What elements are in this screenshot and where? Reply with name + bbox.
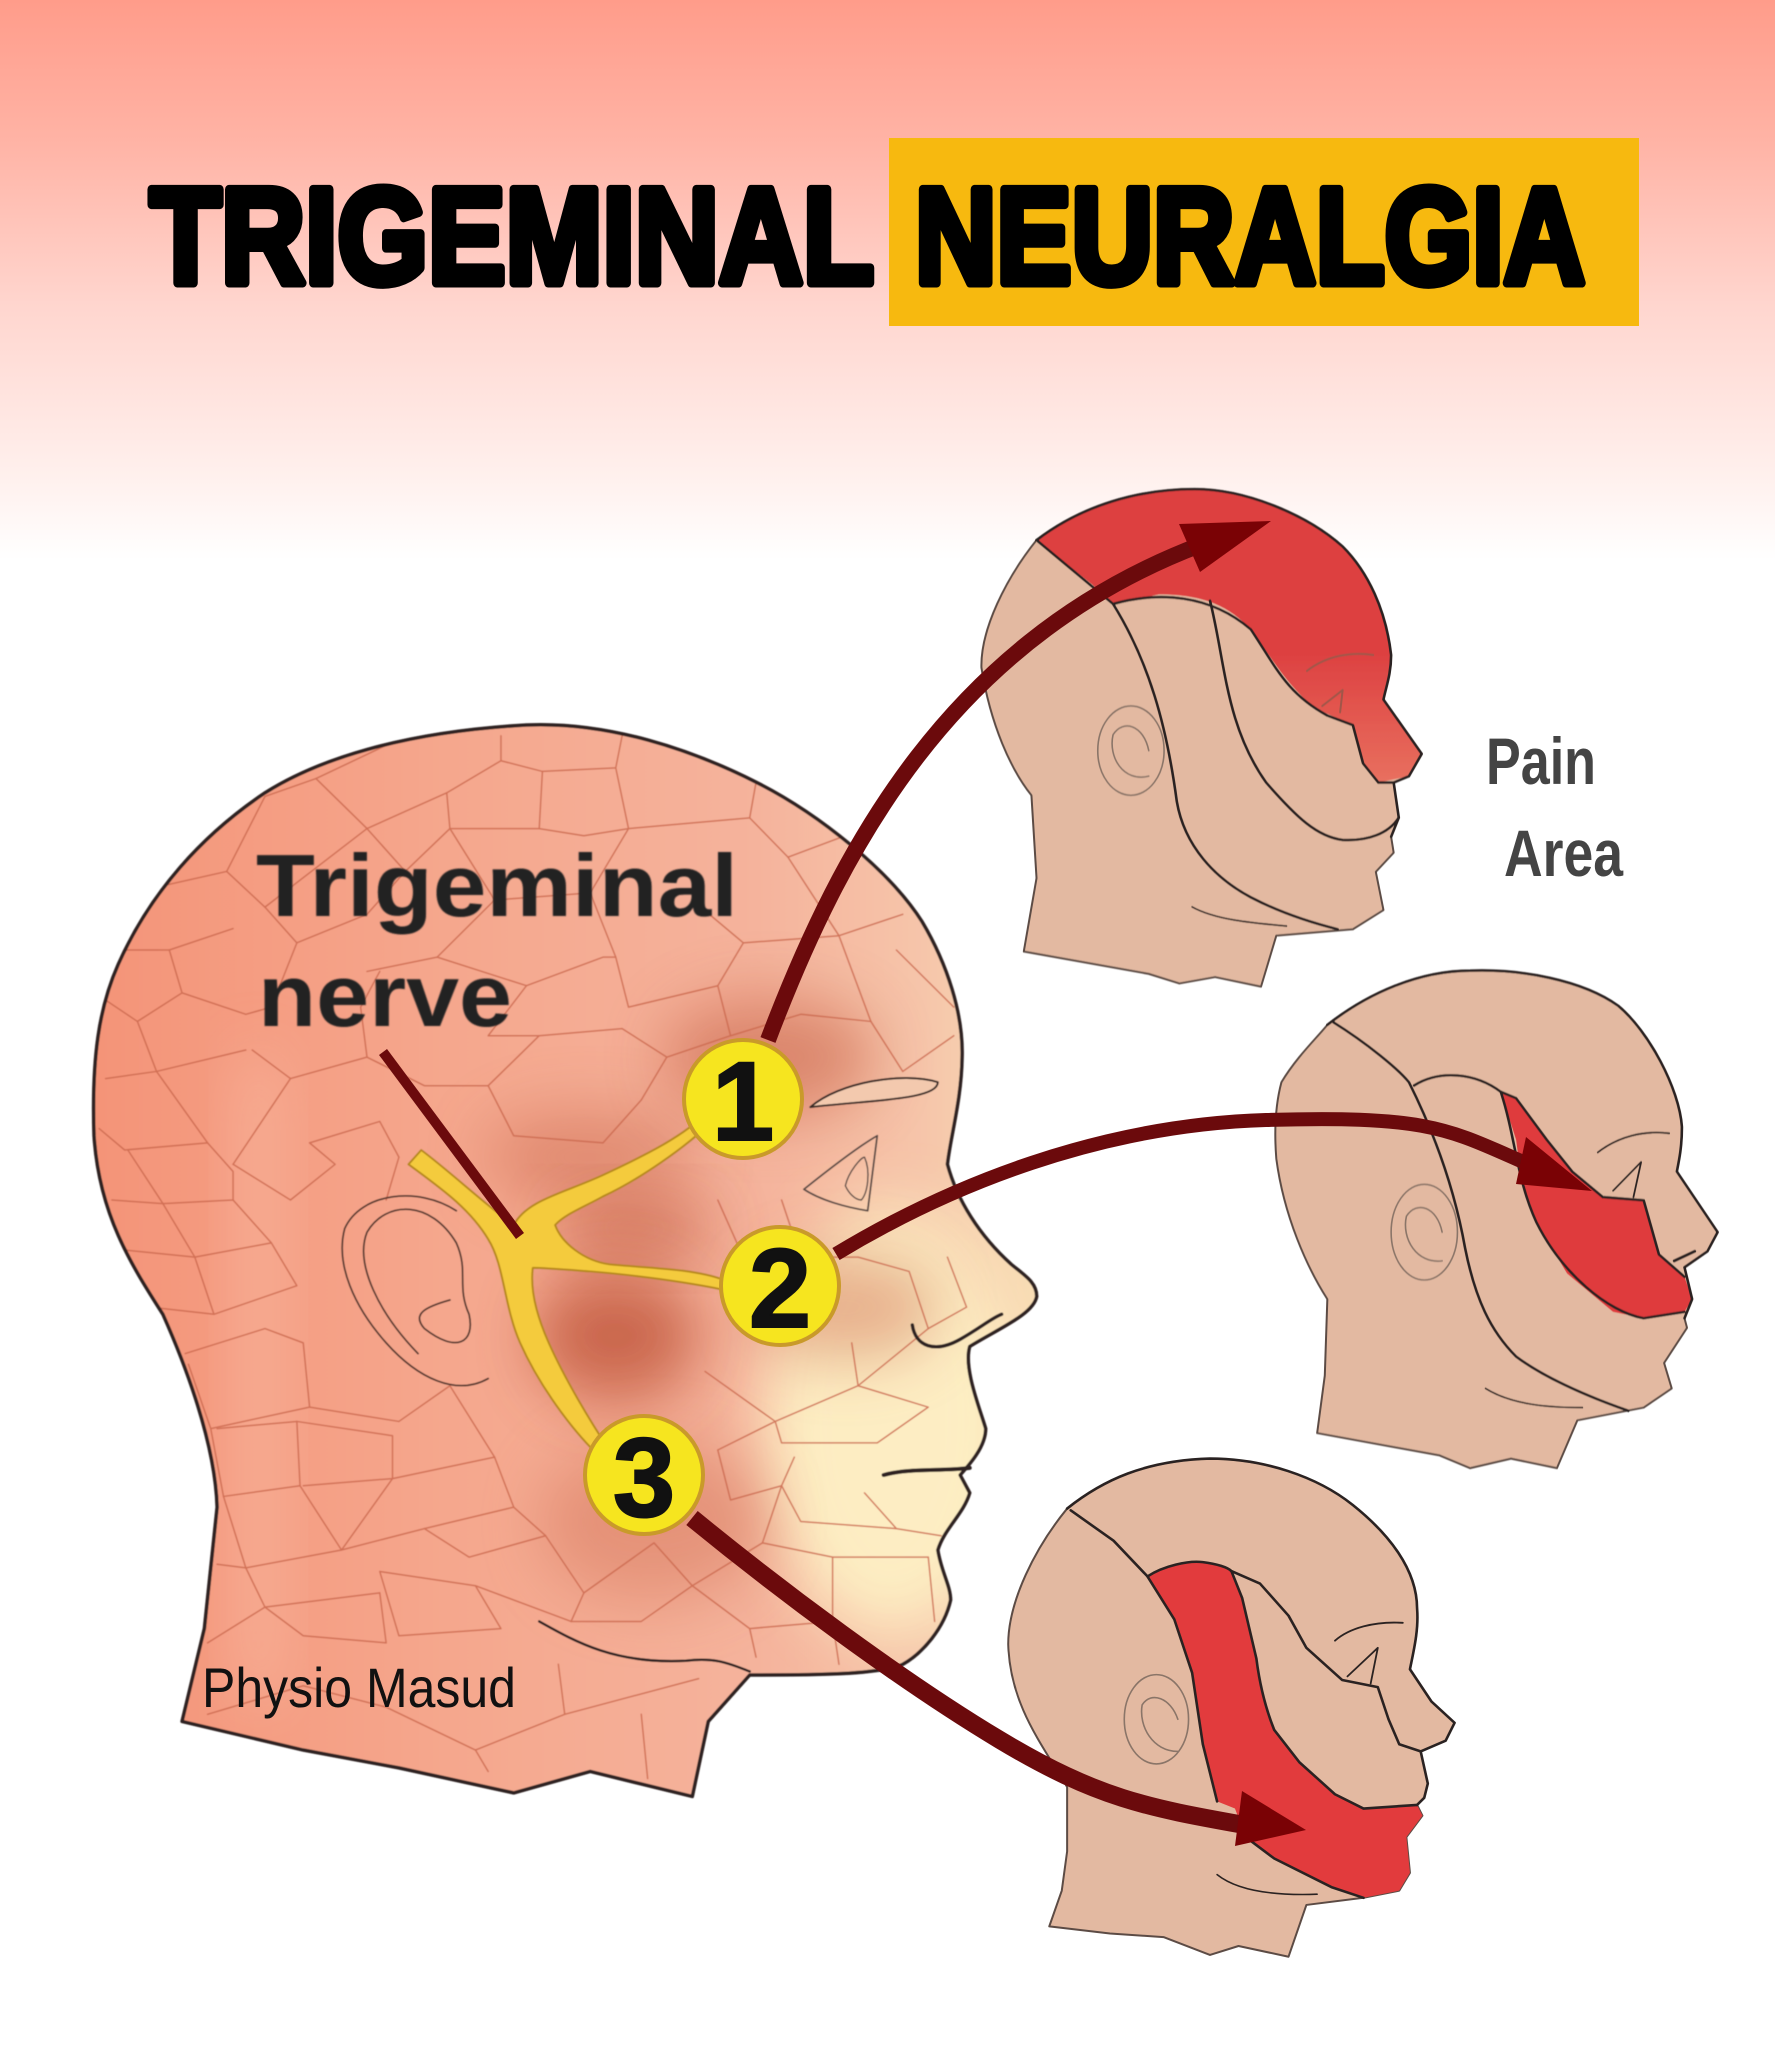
label: pain area — [1486, 724, 1624, 890]
pain area head 1 — [981, 489, 1422, 987]
label: pain area: Pain — [1486, 724, 1596, 798]
marker 2 — [721, 1226, 839, 1351]
outline strokes — [1327, 970, 1718, 1411]
ear — [1098, 706, 1164, 795]
eye — [804, 1136, 877, 1211]
head outline — [94, 725, 1037, 1796]
nostril — [912, 1314, 1002, 1347]
outline strokes — [1037, 489, 1422, 929]
marker 3: 3 — [613, 1415, 675, 1540]
ear — [1124, 1675, 1189, 1764]
background gradient — [0, 0, 1775, 560]
head fill — [94, 725, 1037, 1796]
arrow 1: to forehead — [768, 521, 1271, 1040]
marker 1 — [684, 1039, 802, 1164]
marker 3 — [585, 1415, 703, 1540]
label: trigeminal nerve: nerve — [258, 946, 512, 1045]
ear — [342, 1196, 488, 1386]
pain glow areas — [239, 1000, 1018, 1700]
arrow 3: to jaw — [692, 1518, 1306, 1846]
pain region: forehead and nose — [1037, 489, 1422, 783]
pain region: cheek — [1501, 1092, 1692, 1318]
label: trigeminal nerve — [256, 836, 738, 1045]
label: author: Physio Masud — [202, 1656, 516, 1719]
outline strokes — [1067, 1459, 1455, 1898]
trigeminal nerve branches — [408, 1111, 724, 1454]
title highlight box — [889, 138, 1639, 326]
eyebrow — [810, 1078, 938, 1107]
label: pain area: Area — [1504, 816, 1624, 890]
label: trigeminal nerve: Trigeminal — [256, 836, 738, 935]
eyebrow and eye — [1307, 654, 1373, 712]
main head illustration — [94, 725, 1037, 1796]
skin cell pattern — [99, 736, 967, 1779]
title word: trigeminal: TRIGEMINAL — [150, 160, 874, 312]
title — [150, 138, 1639, 326]
jaw line — [539, 1621, 750, 1671]
ear — [1391, 1184, 1457, 1280]
title word: neuralgia: NEURALGIA — [915, 160, 1585, 312]
pain area head 3 — [1008, 1459, 1455, 1957]
leader line to nerve — [383, 1052, 520, 1236]
mouth — [884, 1468, 970, 1475]
arrow 2: to cheek — [836, 1119, 1592, 1254]
pain region: jaw — [1147, 1562, 1422, 1898]
pain area head 2 — [1275, 970, 1718, 1468]
marker 1: 1 — [712, 1039, 774, 1164]
marker 2: 2 — [749, 1226, 811, 1351]
